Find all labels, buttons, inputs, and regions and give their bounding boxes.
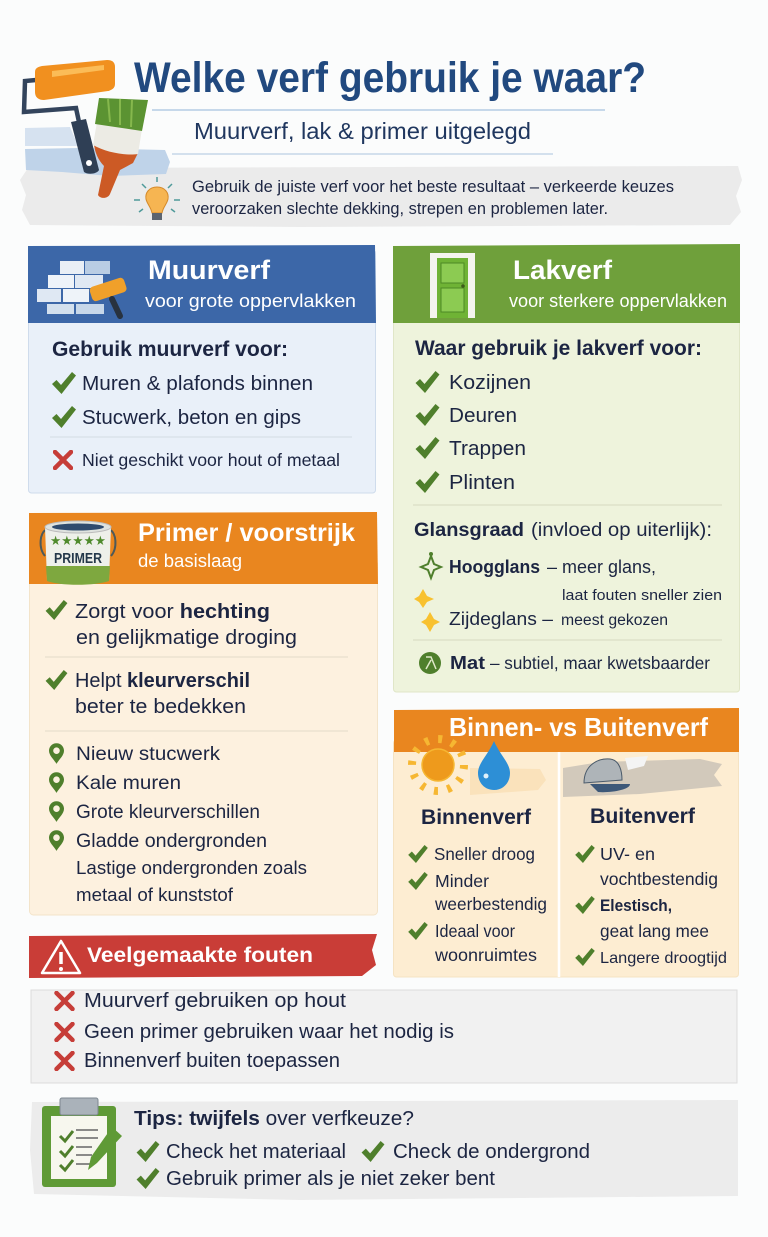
icon: paint brush <box>93 98 148 198</box>
panel: lakverf <box>393 244 740 692</box>
binnenverf list: Sneller droog <box>434 844 535 864</box>
item: kozijnen: Kozijnen <box>449 372 531 394</box>
item: kozijnen <box>416 371 531 394</box>
item: muren: Muren & plafonds binnen <box>82 373 313 395</box>
buitenverf list: geat lang mee <box>600 921 709 941</box>
icon: clipboard <box>42 1098 122 1187</box>
intro band <box>20 166 742 227</box>
buitenverf list: vochtbestendig <box>600 869 718 889</box>
zijdeglans: meest gekozen <box>561 612 668 629</box>
hoogglans: laat fouten sneller zien <box>562 587 722 604</box>
benefit: kleurverschil: Helpt kleurverschil <box>75 670 250 692</box>
tip 2: Check de ondergrond <box>393 1141 590 1163</box>
icon: brick wall with roller <box>37 261 128 316</box>
lakverf header <box>393 244 740 323</box>
buitenverf heading: Buitenverf <box>590 805 696 828</box>
intro text <box>192 178 674 218</box>
list: toepassingen: Kale muren <box>76 773 181 794</box>
hoogglans <box>421 552 722 604</box>
buitenverf list: UV- en <box>600 844 655 864</box>
benefit: hechting: en gelijkmatige droging <box>76 627 297 649</box>
can stars: ★★★★★ <box>50 533 106 548</box>
muurverf subtitle: voor grote oppervlakken <box>145 291 356 311</box>
item: deuren: Deuren <box>449 405 517 427</box>
item: plinten: Plinten <box>449 472 515 494</box>
icon: sun <box>412 739 464 791</box>
muurverf title: Muurverf <box>148 255 271 285</box>
blue paint swash behind tools <box>25 127 170 176</box>
buitenverf list: Langere droogtijd <box>600 950 727 967</box>
item: deuren <box>416 404 517 427</box>
icon: yellow star <box>414 589 434 608</box>
hoogglans: Hoogglans <box>449 557 540 577</box>
list: toepassingen: Grote kleurverschillen <box>76 802 260 823</box>
list: toepassingen: Nieuw stucwerk <box>76 744 221 765</box>
binnenverf list: weerbestendig <box>434 894 547 914</box>
beige swash <box>470 768 546 795</box>
icon: light bulb <box>134 177 180 220</box>
intro text: veroorzaken slechte dekking, strepen en problemen later. <box>192 200 608 218</box>
zijdeglans: Zijdeglans – <box>449 608 554 629</box>
lakverf title: Lakverf <box>513 255 613 285</box>
glansgraad heading <box>414 519 712 541</box>
binnenverf list: woonruimtes <box>434 945 537 965</box>
muurverf heading: Gebruik muurverf voor: <box>52 338 288 361</box>
mat <box>419 652 710 674</box>
binnen buiten header <box>394 708 739 752</box>
can label: PRIMER <box>54 550 102 567</box>
item: trappen <box>416 437 526 460</box>
benefit: hechting: Zorgt voor hechting <box>75 601 270 623</box>
icon: paint roller <box>24 60 115 174</box>
fout 2: Geen primer gebruiken waar het nodig is <box>84 1021 454 1043</box>
fout 3: Binnenverf buiten toepassen <box>84 1050 340 1072</box>
buitenverf list <box>575 844 727 967</box>
muurverf header <box>28 245 376 323</box>
title: Welke verf gebruik je waar? <box>134 54 646 102</box>
item: plinten <box>416 471 515 494</box>
binnenverf list <box>408 844 547 965</box>
panel: veelgemaakte fouten <box>29 934 737 1083</box>
benefit: hechting <box>46 600 297 649</box>
panel: muurverf <box>28 245 376 493</box>
panel: primer <box>29 512 378 915</box>
primer title: Primer / voorstrijk <box>138 519 355 547</box>
item: trappen: Trappen <box>449 438 526 460</box>
icon: water drop <box>478 741 510 790</box>
icon: primer can <box>41 521 115 585</box>
binnenverf list: Minder <box>435 871 489 891</box>
lakverf subtitle: voor sterkere oppervlakken <box>509 291 727 311</box>
benefit: kleurverschil: beter te bedekken <box>75 696 246 718</box>
primer subtitle: de basislaag <box>138 551 242 571</box>
binnenverf list: Ideaal voor <box>435 921 515 941</box>
buitenverf list: Elestisch, <box>600 897 672 915</box>
binnenverf heading: Binnenverf <box>421 806 532 829</box>
fouten title: Veelgemaakte fouten <box>87 944 313 967</box>
title: Binnen- vs Buitenverf <box>449 712 708 742</box>
list: toepassingen: Gladde ondergronden <box>76 831 267 852</box>
tip 1: Check het materiaal <box>166 1141 346 1163</box>
intro text: Gebruik de juiste verf voor het beste resultaat – verkeerde keuzes <box>192 178 674 196</box>
list: toepassingen <box>49 743 307 905</box>
benefit: kleurverschil <box>46 670 250 718</box>
gray swash <box>563 759 722 797</box>
icon: green door <box>430 253 475 318</box>
subtitle: Muurverf, lak & primer uitgelegd <box>194 118 531 144</box>
item: niet geschikt: Niet geschikt voor hout of metaal <box>82 450 340 470</box>
zijdeglans <box>421 608 668 632</box>
list: toepassingen: Lastige ondergronden zoals <box>76 857 307 878</box>
icon: cap <box>584 756 648 792</box>
list: toepassingen: metaal of kunststof <box>76 884 234 905</box>
fout 1: Muurverf gebruiken op hout <box>84 990 346 1012</box>
hoogglans: – meer glans, <box>547 556 656 577</box>
fouten banner <box>29 934 377 978</box>
mat: Mat <box>450 652 485 673</box>
panel: binnen vs buitenverf <box>394 708 739 977</box>
tips heading: Tips: twijfels over verfkeuze? <box>134 1108 414 1130</box>
lakverf heading: Waar gebruik je lakverf voor: <box>415 337 702 360</box>
mat: – subtiel, maar kwetsbaarder <box>490 653 710 673</box>
tip 3: Gebruik primer als je niet zeker bent <box>166 1168 495 1190</box>
header tools <box>24 60 170 198</box>
panel: tips <box>30 1098 738 1200</box>
item: stucwerk: Stucwerk, beton en gips <box>82 407 301 429</box>
icon: warning triangle <box>42 941 80 973</box>
glansgraad heading: (invloed op uiterlijk): <box>531 520 712 541</box>
glansgraad heading: Glansgraad <box>414 519 524 541</box>
primer header <box>29 512 378 584</box>
